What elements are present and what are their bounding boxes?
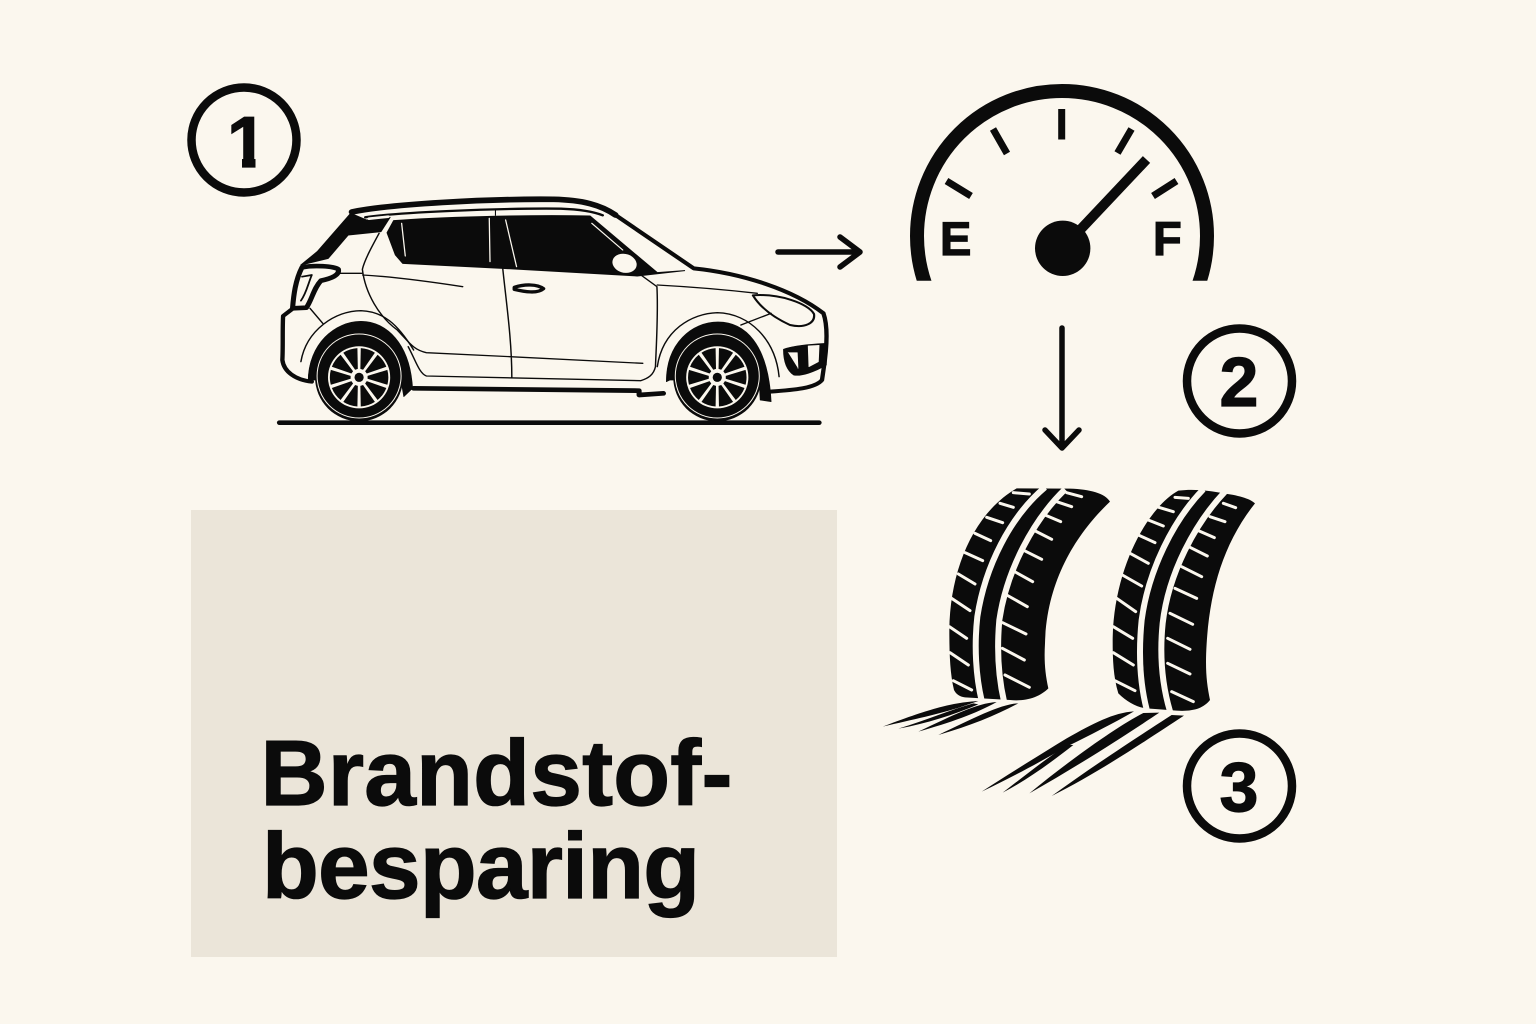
title: Brandstof-	[260, 721, 733, 825]
ground line	[279, 416, 819, 430]
badge: number 3: 3	[1220, 748, 1258, 826]
title: besparing	[262, 814, 699, 918]
gauge ticks	[946, 109, 1176, 196]
right tire	[1113, 489, 1255, 711]
icon: car side view	[279, 199, 827, 423]
door and body lines	[310, 233, 771, 381]
car body outline	[282, 215, 827, 392]
right tire skid marks	[982, 711, 1184, 796]
label E: E	[940, 212, 971, 265]
panel: title box	[191, 510, 837, 957]
roof and window glass	[301, 199, 685, 276]
door handle	[514, 285, 543, 292]
mirror	[609, 251, 640, 276]
title	[260, 721, 733, 918]
icon: fuel gauge	[910, 84, 1214, 281]
headlight	[753, 295, 814, 326]
tail light	[293, 266, 339, 308]
arrow: car to gauge	[778, 237, 860, 267]
badge: number 2: 2	[1220, 343, 1258, 421]
icon: tires with skid marks	[883, 487, 1255, 796]
front wheel	[673, 333, 761, 421]
left tire	[949, 487, 1110, 701]
sill	[414, 388, 663, 395]
badge: number 2	[1187, 328, 1292, 434]
label F: F	[1153, 212, 1182, 265]
gauge needle	[1035, 160, 1146, 276]
gauge arc	[910, 84, 1214, 281]
badge: number 1: 1	[227, 103, 267, 183]
front grille	[783, 343, 826, 375]
badge: number 1	[192, 88, 296, 192]
arrow: gauge to tires	[1045, 328, 1079, 448]
wheel arches	[301, 311, 779, 377]
rear wheel	[315, 333, 403, 421]
left tire skid marks	[883, 701, 1018, 735]
badge: number 3	[1187, 734, 1292, 838]
